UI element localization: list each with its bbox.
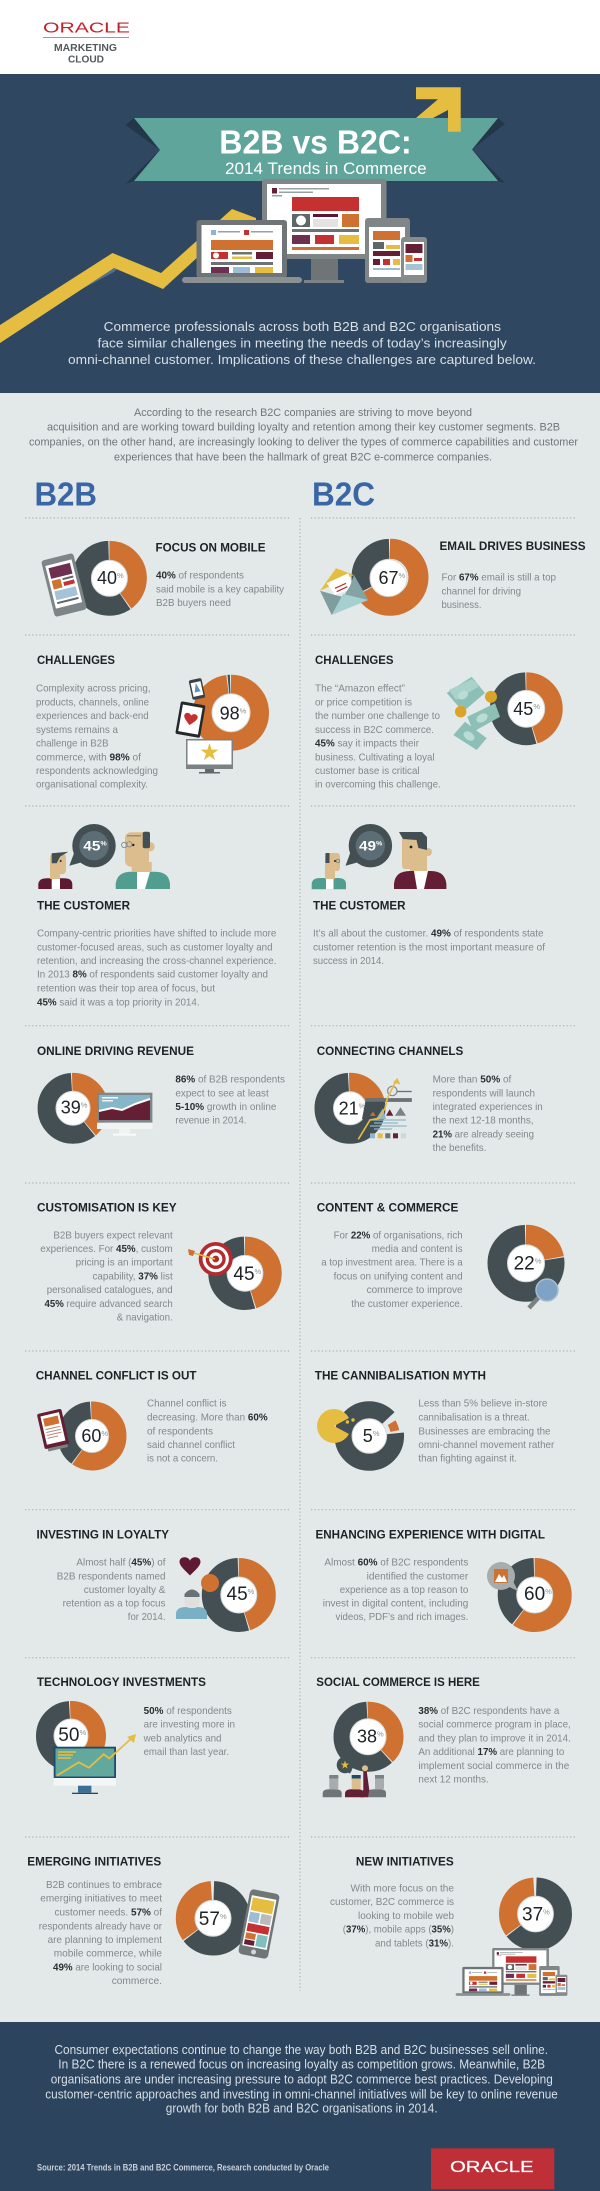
body text bbox=[143, 1706, 235, 1758]
body text bbox=[313, 929, 545, 967]
closing statement: growth for both B2B and B2C organisations in 2014. bbox=[166, 2101, 438, 2116]
source note: Source: 2014 Trends in B2B and B2C Commerce, Research conducted by Oracle bbox=[37, 2162, 329, 2173]
body text bbox=[418, 1706, 571, 1786]
hero paragraph: face similar challenges in meeting the needs of today’s increasingly bbox=[98, 336, 507, 350]
person: large man bbox=[394, 832, 446, 889]
body text: of respondents bbox=[147, 1426, 213, 1437]
donut 98% bbox=[202, 684, 260, 741]
body text: mobile commerce, while bbox=[54, 1949, 162, 1960]
donut 60% bbox=[507, 1568, 562, 1622]
header: oracle marketing cloud logo bbox=[0, 0, 600, 74]
panel: connecting channels bbox=[317, 1044, 543, 1154]
body text bbox=[57, 1558, 166, 1623]
icon: heart and person bbox=[176, 1557, 219, 1619]
donut 45%: 45 bbox=[513, 699, 533, 719]
body text: retention as a top focus bbox=[63, 1599, 166, 1610]
body text: 45% say it impacts their bbox=[315, 739, 420, 750]
body text bbox=[442, 573, 556, 611]
body text: & navigation. bbox=[117, 1313, 173, 1324]
body text bbox=[36, 684, 158, 791]
heading: FOCUS ON MOBILE bbox=[156, 541, 266, 555]
title: B2B vs B2C: bbox=[219, 124, 412, 161]
body text: Almost half (45%) of bbox=[76, 1558, 166, 1569]
hero paragraph bbox=[68, 319, 536, 367]
body text: 40% of respondents bbox=[156, 570, 244, 581]
body text: 50% of respondents bbox=[144, 1706, 232, 1717]
heading: SOCIAL COMMERCE IS HERE bbox=[316, 1675, 480, 1689]
body text: It’s all about the customer. 49% of respondents state bbox=[313, 929, 544, 940]
oracle logo box bbox=[431, 2148, 554, 2189]
donut 21%: 21 bbox=[339, 1098, 359, 1118]
donut 57%: 57 bbox=[199, 1909, 220, 1930]
heading: EMAIL DRIVES BUSINESS bbox=[440, 539, 586, 553]
donut 45%: % bbox=[248, 1587, 255, 1596]
body text bbox=[175, 1075, 285, 1127]
panel: social commerce is here bbox=[316, 1675, 571, 1797]
donut 22%: 22 bbox=[514, 1253, 535, 1274]
donut 21% bbox=[324, 1082, 376, 1134]
intro text bbox=[29, 407, 578, 463]
heading: THE CANNIBALISATION MYTH bbox=[315, 1368, 486, 1382]
panel: enhancing experience with digital bbox=[316, 1527, 562, 1623]
donut 50%: % bbox=[79, 1728, 86, 1737]
header: oracle marketing cloud logo: CLOUD bbox=[68, 55, 104, 66]
donut 22% bbox=[498, 1235, 554, 1292]
body text: is not a concern. bbox=[147, 1454, 218, 1465]
body text: the customer experience. bbox=[351, 1299, 463, 1310]
body text bbox=[418, 1399, 555, 1465]
speech bubble 49% bbox=[346, 824, 392, 867]
body text: commerce, with 98% of bbox=[36, 752, 141, 763]
body text: 38% of B2C respondents have a bbox=[418, 1706, 560, 1717]
body text: B2B respondents named bbox=[57, 1571, 166, 1582]
icons: phone, tablet, monitor bbox=[175, 678, 233, 774]
intro text: experiences that have been the hallmark of great B2C e-commerce companies. bbox=[114, 451, 492, 463]
heading: CHANNEL CONFLICT IS OUT bbox=[36, 1368, 197, 1382]
body text: customer base is critical bbox=[315, 766, 420, 777]
panel: email drives business bbox=[320, 539, 586, 615]
body text: 45% said it was a top priority in 2014. bbox=[37, 997, 200, 1008]
icon: target bbox=[188, 1242, 233, 1276]
donut 67%: 67 bbox=[378, 568, 399, 588]
body text: retention was their top area of focus, but bbox=[37, 983, 215, 994]
icon: analytics monitor bbox=[54, 1734, 136, 1794]
icon: devices bbox=[456, 1948, 567, 1996]
donut 57%: % bbox=[220, 1912, 227, 1921]
heading: CUSTOMISATION IS KEY bbox=[37, 1200, 177, 1214]
body text: for 2014. bbox=[128, 1612, 166, 1623]
body text: next 12 months. bbox=[418, 1775, 489, 1786]
panel: B2C the customer bbox=[312, 824, 545, 967]
body text: media and content is bbox=[372, 1244, 463, 1255]
donut 57% bbox=[185, 1891, 241, 1946]
panel: technology investments bbox=[37, 1675, 235, 1794]
donut 60% bbox=[66, 1410, 118, 1462]
person: large man bbox=[116, 832, 170, 889]
donut 40% bbox=[82, 551, 137, 606]
panel: new initiatives bbox=[330, 1855, 567, 1996]
heading: TECHNOLOGY INVESTMENTS bbox=[37, 1675, 206, 1689]
donut 45% bbox=[211, 1568, 266, 1622]
body text: experiences. For 45%, custom bbox=[40, 1244, 173, 1255]
growth line bbox=[0, 209, 256, 343]
body text: said mobile is a key capability bbox=[156, 584, 285, 595]
donut 39%: 39 bbox=[61, 1097, 81, 1117]
body text bbox=[323, 1558, 469, 1623]
body text: Almost 60% of B2C respondents bbox=[324, 1558, 468, 1569]
heading: THE CUSTOMER bbox=[37, 898, 130, 912]
icon: smartphone bbox=[238, 1889, 280, 1959]
donut 45% bbox=[218, 1246, 272, 1301]
header: oracle marketing cloud logo: ORACLE bbox=[43, 20, 130, 36]
panel: emerging initiatives bbox=[27, 1855, 280, 1987]
body text: success in 2014. bbox=[313, 956, 384, 967]
body text bbox=[147, 1399, 268, 1465]
body text: customer needs. 57% of bbox=[54, 1908, 162, 1919]
panel: B2C challenges bbox=[315, 653, 554, 791]
body text: revenue in 2014. bbox=[175, 1116, 246, 1127]
body text: customer retention is the most important measure of bbox=[313, 942, 545, 953]
body text bbox=[37, 929, 277, 1008]
body text: looking to mobile web bbox=[358, 1911, 454, 1922]
donut 67% bbox=[362, 549, 418, 606]
heading: THE CUSTOMER bbox=[313, 898, 406, 912]
speech bubble 49%: % bbox=[376, 840, 383, 848]
hero paragraph: Commerce professionals across both B2B and B2C organisations bbox=[104, 319, 501, 334]
body text: and tablets (31%). bbox=[375, 1938, 454, 1949]
donut 39% bbox=[47, 1082, 99, 1134]
body text: 21% are already seeing bbox=[433, 1129, 534, 1140]
speech bubble 45%: 45 bbox=[83, 838, 99, 854]
body text: the benefits. bbox=[433, 1143, 486, 1154]
heading: CONTENT & COMMERCE bbox=[317, 1200, 458, 1214]
body text: integrated experiences in bbox=[433, 1102, 543, 1113]
donut 67%: % bbox=[399, 571, 406, 580]
body text: respondents will launch bbox=[433, 1088, 535, 1099]
body text: challenge in B2B bbox=[36, 739, 109, 750]
body text: Less than 5% believe in-store bbox=[418, 1399, 548, 1410]
icon: envelope bbox=[320, 568, 368, 615]
body text: decreasing. More than 60% bbox=[147, 1412, 268, 1423]
body text: With more focus on the bbox=[350, 1884, 454, 1895]
column heading: B2C: B2C bbox=[312, 477, 375, 514]
heading: CHALLENGES bbox=[315, 653, 394, 667]
hero panel bbox=[0, 74, 600, 393]
donut 40%: 40 bbox=[97, 568, 117, 588]
closing statement: In B2C there is a renewed focus on increasing loyalty as competition grows. Meanwhile, B2B bbox=[58, 2057, 545, 2072]
body text: respondents acknowledging bbox=[36, 766, 158, 777]
body text: web analytics and bbox=[143, 1733, 222, 1744]
speech bubble 49%: 49 bbox=[359, 838, 375, 854]
heading: CONNECTING CHANNELS bbox=[317, 1044, 463, 1058]
body text: B2B buyers need bbox=[156, 598, 231, 609]
icon: money bbox=[447, 677, 500, 750]
icon: pacman bbox=[317, 1409, 355, 1443]
body text bbox=[156, 570, 285, 609]
body text bbox=[321, 1230, 463, 1310]
body text: personalised catalogues, and bbox=[47, 1285, 173, 1296]
donut 5% bbox=[343, 1410, 395, 1462]
body text: in overcoming this challenge. bbox=[315, 780, 441, 791]
donut 45%: % bbox=[255, 1267, 262, 1276]
body text: More than 50% of bbox=[433, 1075, 511, 1086]
body text: emerging initiatives to meet bbox=[40, 1894, 162, 1905]
body text: B2B continues to embrace bbox=[46, 1880, 162, 1891]
body text: 86% of B2B respondents bbox=[175, 1075, 285, 1086]
body text: channel for driving bbox=[442, 587, 521, 598]
donut 45%: % bbox=[533, 702, 540, 711]
donut 45%: 45 bbox=[233, 1264, 255, 1285]
body text: Businesses are embracing the bbox=[418, 1426, 551, 1437]
body text: An additional 17% are planning to bbox=[418, 1747, 565, 1758]
body text: customer loyalty & bbox=[84, 1585, 166, 1596]
body text: email than last year. bbox=[144, 1747, 229, 1758]
icon: image bubble bbox=[487, 1562, 518, 1591]
body text: than fighting against it. bbox=[418, 1454, 517, 1465]
icon: crowd bbox=[323, 1765, 386, 1797]
speech bubble 45%: % bbox=[100, 840, 107, 848]
body text: B2B buyers expect relevant bbox=[53, 1230, 173, 1241]
heading: INVESTING IN LOYALTY bbox=[36, 1527, 170, 1541]
body text bbox=[40, 1230, 173, 1324]
body text: experience as a top reason to bbox=[340, 1585, 469, 1596]
panel: B2B the customer bbox=[37, 824, 277, 1008]
body text: Channel conflict is bbox=[147, 1399, 226, 1410]
panel: online driving revenue bbox=[37, 1044, 285, 1136]
icon: mobile bbox=[41, 553, 87, 617]
heading: ENHANCING EXPERIENCE WITH DIGITAL bbox=[316, 1527, 545, 1541]
donut 40%: % bbox=[117, 571, 124, 580]
body text: For 22% of organisations, rich bbox=[334, 1230, 463, 1241]
body text bbox=[39, 1880, 163, 1987]
donut 5%: % bbox=[373, 1429, 380, 1438]
body text: focus on unifying content and bbox=[334, 1271, 463, 1282]
donut 60%: % bbox=[545, 1587, 552, 1596]
body text: retention, and increasing the cross-channel experience. bbox=[37, 956, 276, 967]
body text: said channel conflict bbox=[147, 1440, 235, 1451]
footer panel bbox=[0, 2022, 600, 2191]
donut 38% bbox=[337, 1710, 395, 1774]
body text bbox=[433, 1075, 543, 1154]
heading: NEW INITIATIVES bbox=[356, 1855, 454, 1869]
body text: invest in digital content, including bbox=[323, 1599, 469, 1610]
body text: customer-focused areas, such as customer loyalty and bbox=[37, 942, 273, 953]
donut 98%: % bbox=[240, 706, 247, 715]
body text bbox=[315, 684, 441, 791]
body text: organisational complexity. bbox=[36, 780, 148, 791]
intro text: acquisition and are working toward building loyalty and retention among their key customer segments. B2B bbox=[47, 422, 560, 434]
body text: 45% require advanced search bbox=[44, 1299, 173, 1310]
body text: the next 12-18 months, bbox=[433, 1116, 534, 1127]
body text: 49% are looking to social bbox=[53, 1962, 162, 1973]
panel: the cannibalisation myth bbox=[315, 1368, 555, 1465]
icon: magnifying glass bbox=[529, 1279, 558, 1308]
body text: or price competition is bbox=[315, 697, 412, 708]
body text: In 2013 8% of respondents said customer loyalty and bbox=[37, 970, 268, 981]
body text: experiences and back-end bbox=[36, 711, 149, 722]
body text: are investing more in bbox=[144, 1720, 235, 1731]
body text: respondents already have or bbox=[39, 1921, 163, 1932]
donut 22%: % bbox=[535, 1256, 542, 1265]
donut 37% bbox=[508, 1887, 563, 1941]
body text: videos, PDF’s and rich images. bbox=[336, 1612, 468, 1623]
body text: business. bbox=[442, 600, 482, 611]
donut 50%: 50 bbox=[58, 1725, 79, 1746]
donut 98%: 98 bbox=[220, 703, 240, 723]
panel: content and commerce bbox=[317, 1200, 558, 1310]
person: small man bbox=[312, 853, 346, 889]
donut 50% bbox=[45, 1710, 97, 1762]
icon: tablet bbox=[37, 1409, 70, 1452]
body text bbox=[330, 1884, 454, 1949]
body text: For 67% email is still a top bbox=[442, 573, 556, 584]
panel: investing in loyalty bbox=[36, 1527, 266, 1623]
subtitle: 2014 Trends in Commerce bbox=[225, 159, 427, 178]
panel: channel conflict is out bbox=[36, 1368, 268, 1465]
column heading: B2B: B2B bbox=[34, 477, 97, 514]
body text: products, channels, online bbox=[36, 697, 149, 708]
body text: commerce. bbox=[112, 1976, 162, 1987]
body text: 5-10% growth in online bbox=[175, 1102, 277, 1113]
donut 37%: % bbox=[543, 1908, 550, 1917]
donut 60%: % bbox=[101, 1429, 108, 1438]
speech bubble 45% bbox=[69, 824, 116, 867]
donut 5%: 5 bbox=[363, 1426, 373, 1446]
arrow head bbox=[416, 87, 461, 118]
donut 60%: 60 bbox=[81, 1426, 101, 1446]
person: small man bbox=[38, 852, 72, 889]
closing statement bbox=[45, 2042, 558, 2116]
closing statement: Consumer expectations continue to change the way both B2B and B2C businesses sell online. bbox=[54, 2042, 548, 2057]
heading: ONLINE DRIVING REVENUE bbox=[37, 1044, 194, 1058]
body text: The “Amazon effect” bbox=[315, 684, 406, 695]
devices illustration bbox=[182, 179, 427, 283]
closing statement: organisations are under increasing pressure to adopt B2C commerce best practices. Developing bbox=[51, 2072, 553, 2087]
body text: omni-channel movement rather bbox=[418, 1440, 555, 1451]
body text: are planning to implement bbox=[48, 1935, 162, 1946]
icon: channels diagram bbox=[358, 1078, 412, 1139]
icon: analytics monitor bbox=[97, 1093, 152, 1136]
header: oracle marketing cloud logo: MARKETING bbox=[54, 43, 117, 54]
body text: systems remains a bbox=[36, 725, 118, 736]
hero paragraph: omni-channel customer. Implications of these challenges are captured below. bbox=[68, 352, 536, 367]
body text: customer, B2C commerce is bbox=[330, 1897, 454, 1908]
body text: pricing is an important bbox=[76, 1258, 173, 1269]
body text: implement social commerce in the bbox=[418, 1761, 570, 1772]
body text: a top investment area. There is a bbox=[321, 1258, 463, 1269]
body text: Company-centric priorities have shifted to include more bbox=[37, 929, 277, 940]
body text: identified the customer bbox=[367, 1571, 469, 1582]
intro text: According to the research B2C companies are striving to move beyond bbox=[134, 407, 472, 419]
donut 21%: % bbox=[359, 1101, 366, 1110]
donut 38%: % bbox=[377, 1730, 384, 1739]
donut 60%: 60 bbox=[524, 1584, 545, 1605]
body text: the number one challenge to bbox=[315, 711, 440, 722]
banner bbox=[126, 118, 505, 184]
donut 39%: % bbox=[81, 1100, 88, 1109]
panel: customisation is key bbox=[37, 1200, 272, 1324]
panel: B2B challenges bbox=[36, 653, 260, 791]
body text: social commerce program in place, bbox=[418, 1720, 571, 1731]
panel: focus on mobile bbox=[41, 541, 285, 617]
body text: business. Cultivating a loyal bbox=[315, 752, 434, 763]
donut 37%: 37 bbox=[522, 1905, 543, 1926]
body text: Complexity across pricing, bbox=[36, 684, 150, 695]
donut 38%: 38 bbox=[357, 1727, 377, 1747]
body text: success in B2C commerce. bbox=[315, 725, 434, 736]
body text: and they plan to improve it in 2014. bbox=[418, 1733, 571, 1744]
donut 45% bbox=[499, 681, 554, 736]
body text: commerce to improve bbox=[367, 1285, 463, 1296]
heading: CHALLENGES bbox=[37, 653, 115, 667]
donut 45%: 45 bbox=[226, 1584, 248, 1605]
body text: expect to see at least bbox=[175, 1088, 269, 1099]
body text: cannibalisation is a threat. bbox=[418, 1412, 530, 1423]
intro text: companies, on the other hand, are increasingly looking to deliver the types of commerce capabilities and customer bbox=[29, 437, 578, 449]
oracle logo box: ORACLE bbox=[450, 2159, 534, 2176]
body text: capability, 37% list bbox=[92, 1271, 173, 1282]
body text: (37%), mobile apps (35%) bbox=[343, 1925, 454, 1936]
heading: EMERGING INITIATIVES bbox=[27, 1855, 161, 1869]
